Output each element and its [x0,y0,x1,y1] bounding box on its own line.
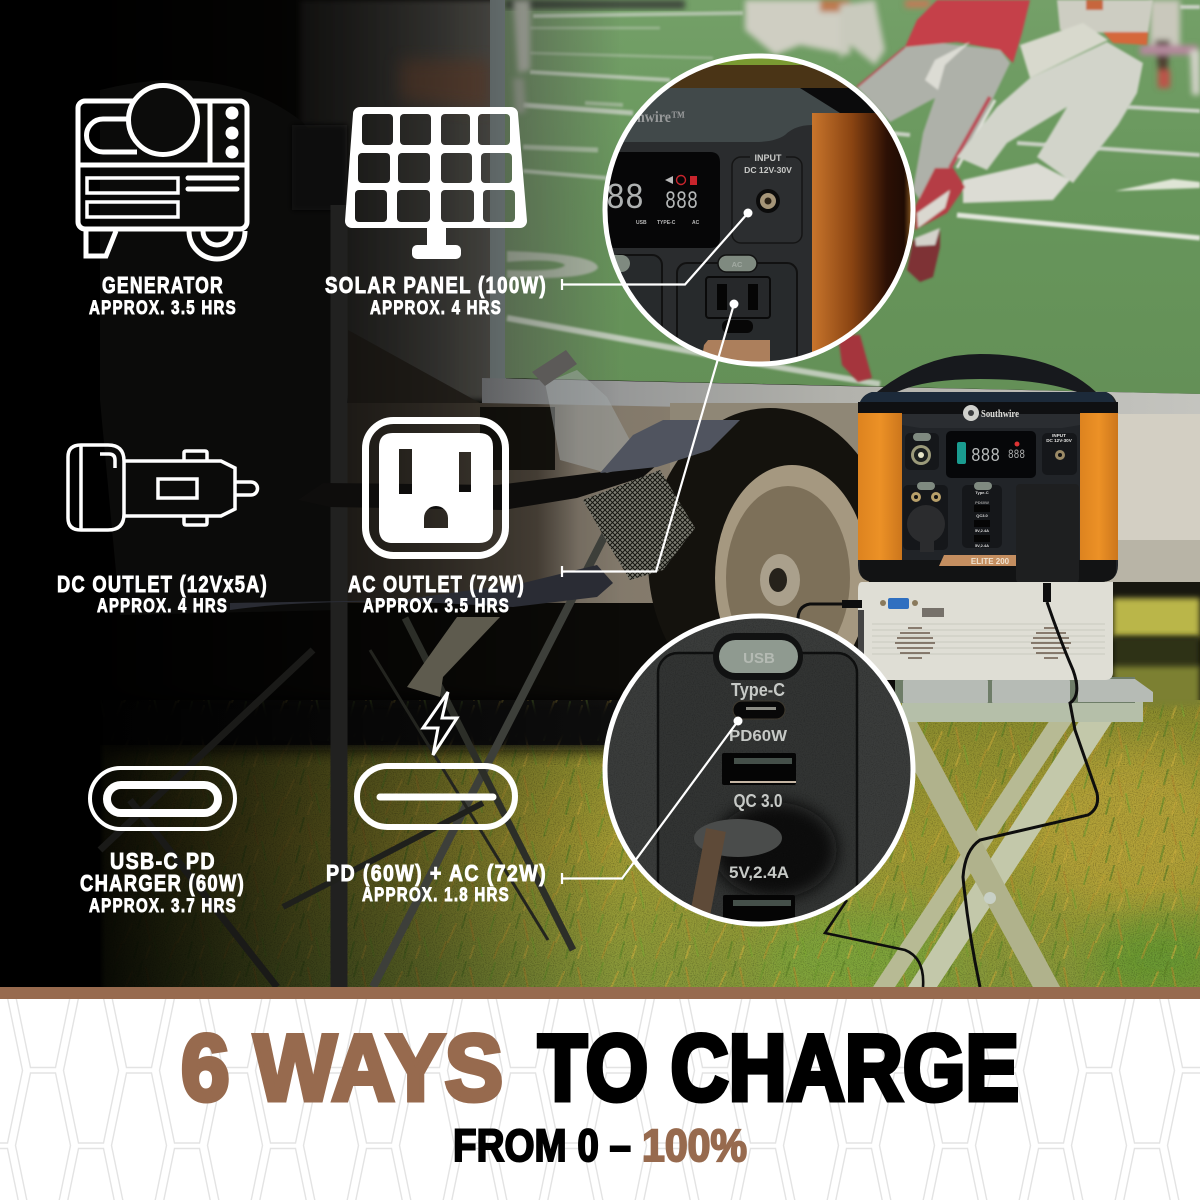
item: USB-C PD charger [80,768,245,917]
power station body [858,392,1118,583]
input port [1042,433,1077,475]
RV wall backdrop [300,0,675,603]
plugged cable [694,819,782,915]
USB outputs [962,482,1002,548]
icon: AC outlet [366,420,506,556]
LCD display: 888 [971,445,1000,467]
football field backdrop [505,0,1200,395]
lower seat edge [230,565,613,610]
field yard lines [507,7,1200,384]
carrying handle [877,354,1096,392]
subtitle: FROM 0 – [453,1120,631,1171]
USB outputs: 5V,2.4A [975,543,989,548]
USB button [713,633,803,680]
port labels: Type-C [731,680,785,700]
truck wheel [648,408,874,646]
brand text: nwire™ [637,109,685,126]
label: USB-C PD charger: CHARGER (60W) [80,870,245,896]
model strip: ELITE 200 [971,557,1010,566]
flashlight [905,433,939,470]
input port bay: INPUT [754,153,782,163]
icon: USB-C port [90,768,235,829]
label: AC outlet [348,571,525,617]
item: generator [78,86,247,319]
DC outputs [903,482,948,552]
label: USB-C PD charger [80,848,245,917]
footer band [0,987,1200,1200]
label: generator: GENERATOR [102,272,224,298]
callout circle: USB-C detail [600,610,920,943]
connector: solar panel to DC input [562,208,752,290]
connector: USB-C PD [562,716,742,884]
title: 6 WAYS [181,1015,503,1120]
item: PD plus AC [326,692,547,906]
label: DC outlet: DC OUTLET (12Vx5A) [57,571,268,597]
port labels: 5V,2.4A [729,863,789,882]
label: PD plus AC [326,860,547,906]
LCD display: 888 [1008,447,1025,462]
label: generator: APPROX. 3.5 HRS [89,298,237,319]
water bottle [532,350,630,473]
label: AC outlet: AC OUTLET (72W) [348,571,525,597]
LCD closeup: AC [692,220,700,226]
model strip [939,555,1018,566]
label: PD plus AC: PD (60W) + AC (72W) [326,860,547,886]
label: USB-C PD charger: APPROX. 3.7 HRS [89,896,237,917]
port labels: PD60W [729,728,788,745]
label: AC outlet: APPROX. 3.5 HRS [363,596,510,617]
grass ground [0,582,1200,1010]
dark left overlay [0,0,620,987]
USB outputs: 5V,2.4A [975,528,989,533]
subtitle: 100% [642,1120,747,1171]
icon: car charger [68,445,258,530]
port labels: QC 3.0 [734,791,782,811]
power adapter [1016,484,1079,583]
USB outputs: Type-C [975,490,989,495]
input port bay [732,152,802,243]
LCD closeup: TYPE-C [657,220,676,226]
AC outlet closeup [700,255,770,370]
USB outputs: QC3.0 [976,513,989,518]
logo: Southwire [981,409,1019,420]
RV side band and body [482,378,1200,593]
seat label tag [407,617,500,697]
lower USB port [723,895,795,922]
armrest and mesh cup holder [583,420,740,580]
input port bay: DC 12V-30V [744,165,792,175]
chair back fabric [100,80,345,615]
callout circle: DC input detail [600,50,920,373]
title: TO CHARGE [538,1015,1019,1120]
item: AC outlet [348,420,525,617]
chair arm band [330,467,654,510]
USB-C port [733,701,785,719]
distant blurred players [513,0,1200,114]
projector [858,582,1113,680]
power cables [798,583,1098,987]
AC outlet closeup: AC [732,260,743,269]
item: solar panel [325,95,547,319]
camp chair [100,80,657,987]
icon: generator [78,86,247,259]
logo [963,405,1019,421]
label: generator [89,272,237,319]
label: solar panel [325,272,547,319]
LCD display [946,431,1036,478]
chair frame tubes [100,205,606,987]
label: PD plus AC: APPROX. 1.8 HRS [362,885,510,906]
input port: DC 12V-30V [1046,438,1073,443]
icon: solar panel [345,107,527,259]
label: solar panel: APPROX. 4 HRS [370,298,502,319]
label: DC outlet [57,571,268,617]
label: USB-C PD charger: USB-C PD [110,848,216,874]
LCD closeup: 888 [665,187,698,216]
item: DC outlet [57,445,268,617]
foreground football players [838,0,1153,382]
LCD closeup: 88 [606,178,644,219]
folding table [873,677,1153,987]
product: portable power station [798,354,1118,987]
USB-A port [722,753,796,785]
title [181,1015,1019,1120]
input port: INPUT [1052,433,1066,438]
label: DC outlet: APPROX. 4 HRS [97,596,228,617]
LCD closeup [600,152,720,248]
connector: AC outlet [562,300,738,577]
label: solar panel: SOLAR PANEL (100W) [325,272,547,298]
USB button: USB [743,650,775,667]
port labels [729,680,789,882]
icon: fast-charge USB-C [357,692,515,827]
USB outputs: PD60W [975,500,989,505]
LCD closeup: USB [636,220,647,226]
